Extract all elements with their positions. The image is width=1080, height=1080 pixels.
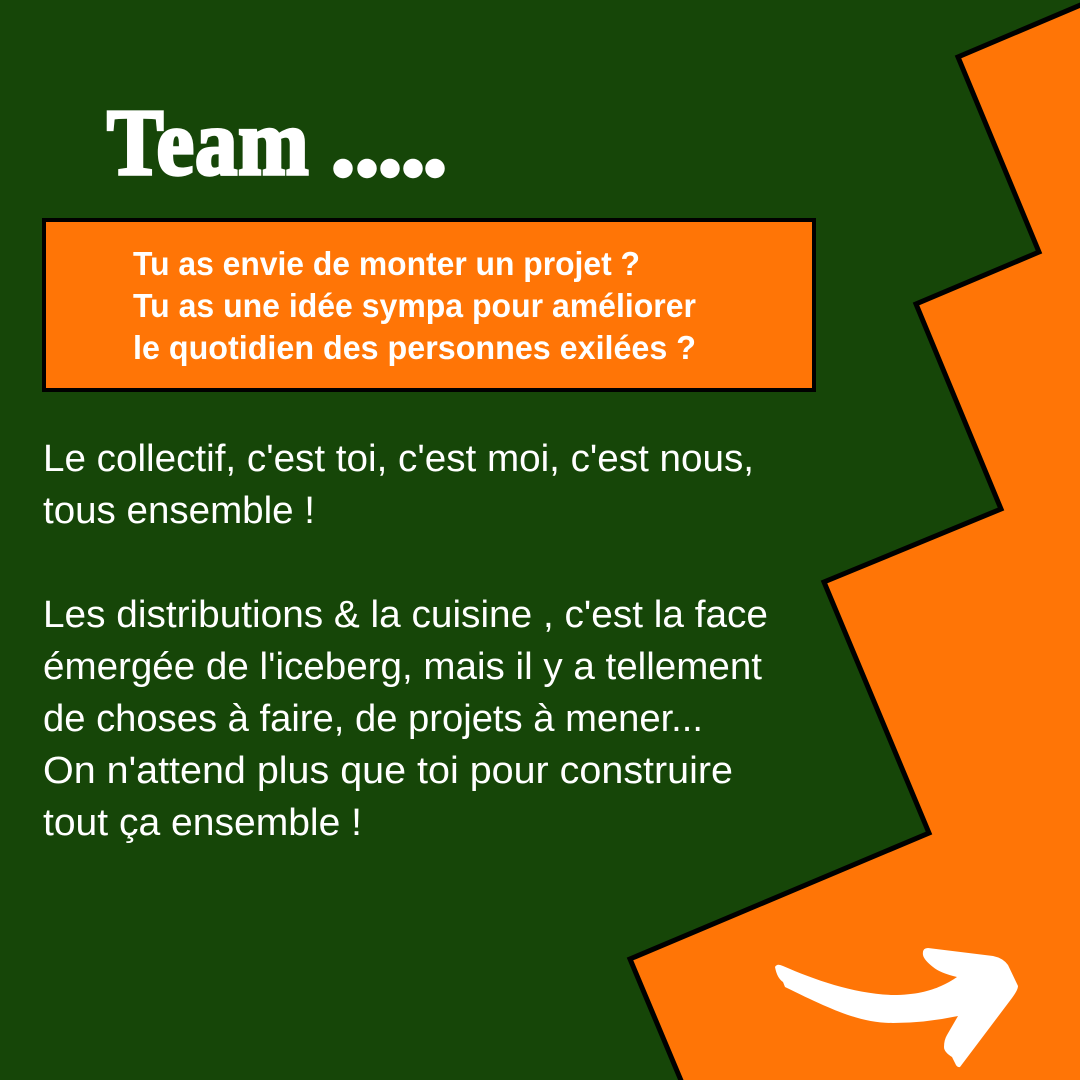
title bbox=[107, 91, 446, 195]
callout text bbox=[133, 245, 696, 366]
title: ..... bbox=[332, 93, 446, 195]
callout text: Tu as une idée sympa pour améliorer bbox=[133, 287, 696, 324]
body paragraph: On n'attend plus que toi pour construire bbox=[43, 750, 733, 792]
zigzag orange panel bbox=[630, 1, 1080, 1080]
body paragraph bbox=[43, 594, 768, 844]
icon: arrow bbox=[775, 948, 1018, 1067]
body paragraph: de choses à faire, de projets à mener... bbox=[43, 698, 703, 740]
callout text: Tu as envie de monter un projet ? bbox=[133, 245, 640, 282]
callout text: le quotidien des personnes exilées ? bbox=[133, 329, 696, 366]
intro paragraph: tous ensemble ! bbox=[43, 490, 315, 532]
body paragraph: tout ça ensemble ! bbox=[43, 802, 362, 844]
intro paragraph bbox=[43, 438, 754, 532]
title: Team bbox=[107, 91, 310, 195]
body paragraph: Les distributions & la cuisine , c'est la face bbox=[43, 594, 768, 636]
callout box bbox=[44, 220, 814, 390]
body paragraph: émergée de l'iceberg, mais il y a tellement bbox=[43, 646, 762, 688]
intro paragraph: Le collectif, c'est toi, c'est moi, c'est nous, bbox=[43, 438, 754, 480]
